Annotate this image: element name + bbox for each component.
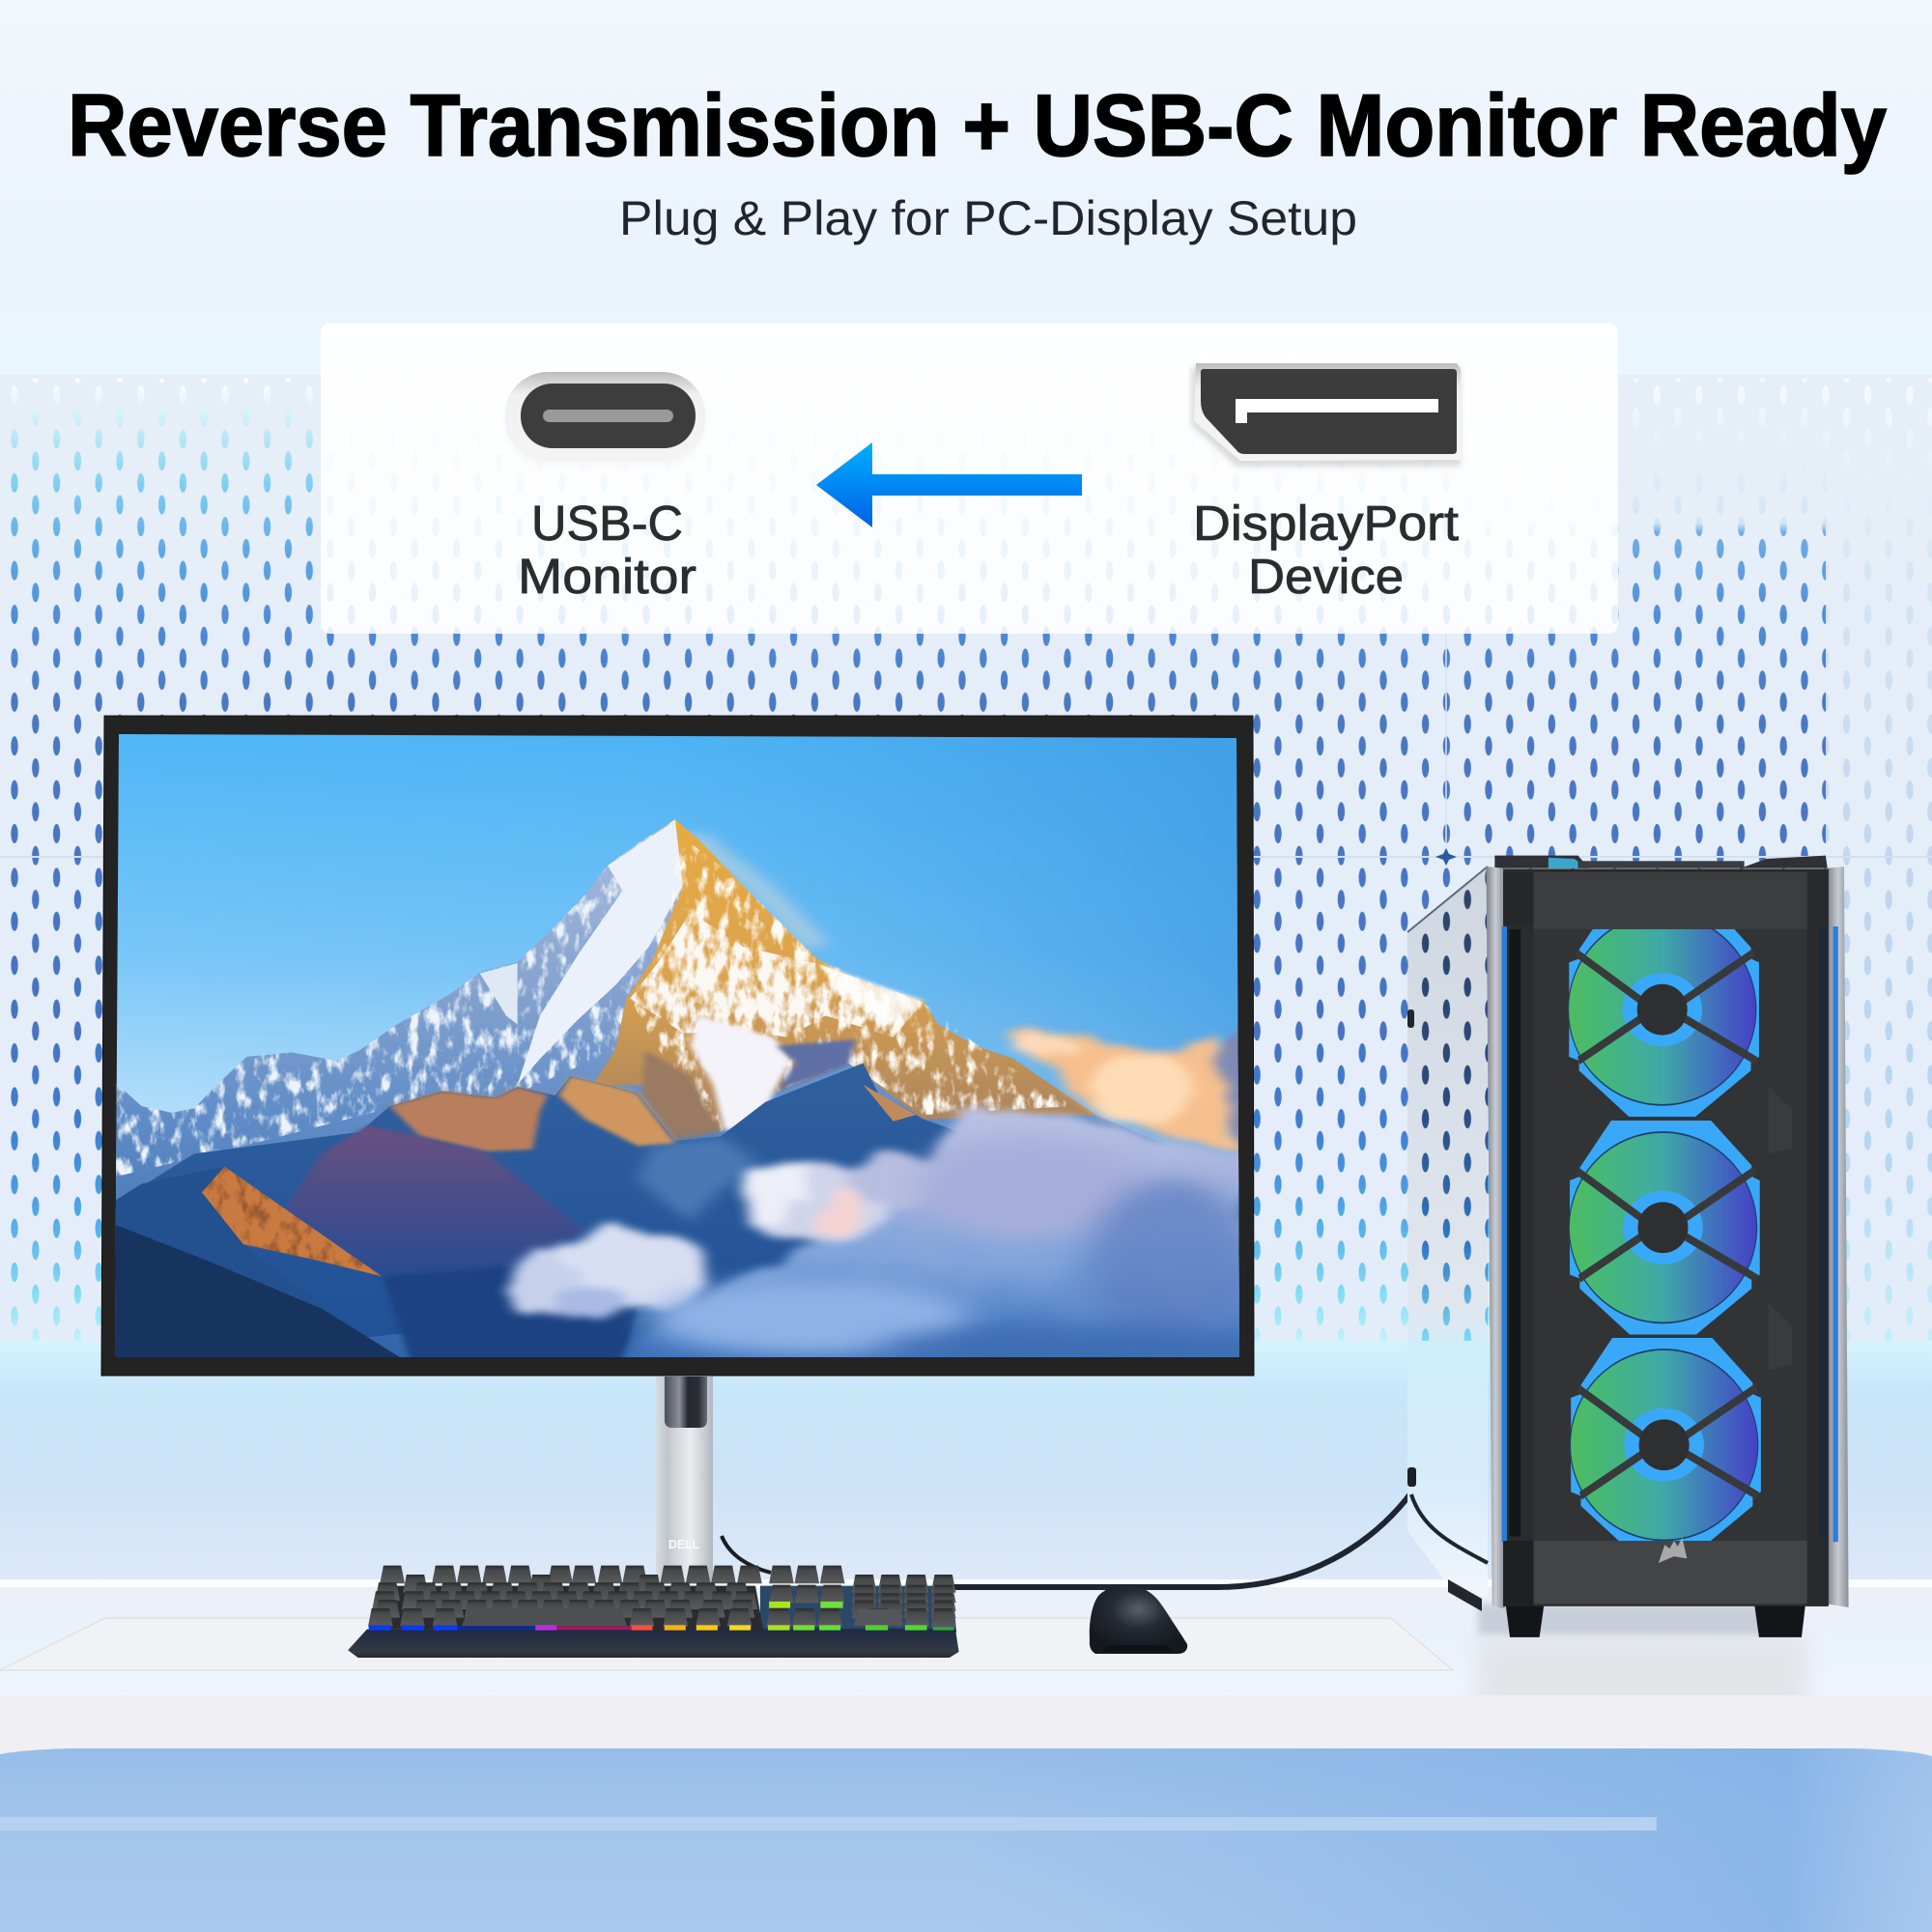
icon: USB-C port xyxy=(505,372,705,467)
tower feet xyxy=(1506,1605,1805,1637)
label: USB-C Monitor: Monitor xyxy=(518,549,696,604)
monitor xyxy=(97,716,1269,1376)
subtitle: Plug & Play for PC-Display Setup xyxy=(619,191,1357,245)
fan 3 xyxy=(1570,1338,1761,1552)
icon: DisplayPort port xyxy=(1191,363,1461,467)
main cloud bank xyxy=(519,1103,1254,1369)
orange sunset cloud xyxy=(999,1028,1242,1153)
PC tower side glass panel xyxy=(1407,862,1494,1611)
cable: USB-C to DisplayPort xyxy=(952,1492,1412,1587)
monitor stand xyxy=(656,1377,713,1584)
board seam star xyxy=(0,634,1932,866)
arrow: DisplayPort to USB-C xyxy=(816,442,1082,527)
panel: connection direction xyxy=(321,323,1618,634)
background: pale top band xyxy=(0,0,1932,375)
tower front bands xyxy=(1503,872,1828,1606)
tower top xyxy=(1494,856,1828,868)
fan 2 xyxy=(1569,1121,1760,1335)
PC tower xyxy=(1487,856,1849,1637)
mouse xyxy=(1090,1585,1187,1654)
desk front shelf xyxy=(0,1748,1932,1932)
background: lower wall xyxy=(0,1341,1932,1582)
desk xyxy=(0,1579,1932,1748)
background: pegboard wall xyxy=(0,375,1932,1341)
monitor stand: DELL xyxy=(668,1537,699,1551)
label: DisplayPort Device xyxy=(1193,496,1459,604)
icon: tower logo xyxy=(1659,1538,1687,1563)
cable: monitor to keyboard area xyxy=(722,1536,771,1573)
label: USB-C Monitor xyxy=(518,496,696,604)
label: DisplayPort Device: DisplayPort xyxy=(1193,496,1459,551)
monitor screen: mountain photo xyxy=(97,731,1269,1369)
label: USB-C Monitor: USB-C xyxy=(531,496,683,551)
label: DisplayPort Device: Device xyxy=(1248,549,1404,604)
tower front xyxy=(1502,868,1838,1606)
pegboard holes xyxy=(0,379,1932,1341)
keyboard xyxy=(348,1566,959,1658)
tower silver frame xyxy=(1487,867,1849,1608)
fan 1 xyxy=(1568,902,1759,1117)
